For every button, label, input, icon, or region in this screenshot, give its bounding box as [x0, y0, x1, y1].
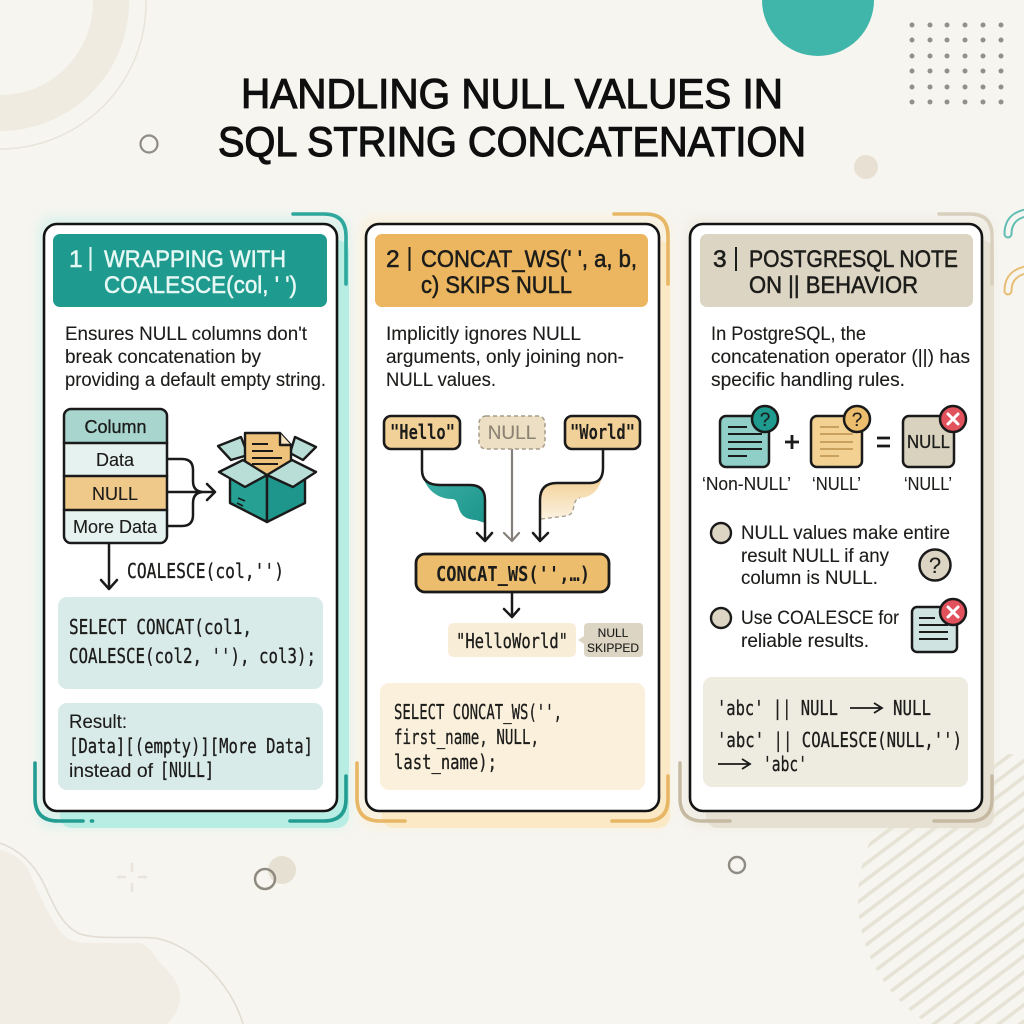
card 3 body [690, 224, 982, 811]
icon: null document: ? [852, 410, 862, 431]
bullet 1: result NULL if any [741, 546, 889, 567]
background: bottom-left blob [0, 850, 180, 1024]
concat_ws function box [416, 554, 609, 592]
card 3 description: specific handling rules. [711, 370, 905, 391]
hello token: "Hello" [390, 420, 455, 444]
equation labels: ‘NULL’ [812, 474, 861, 494]
card 2 corner accents [357, 214, 668, 821]
card 2 header: CONCAT_WS(' ', a, b, [421, 246, 637, 273]
column table: Data [96, 450, 135, 470]
result arrow [504, 593, 519, 617]
icon: null result: NULL [907, 432, 950, 452]
background: top-left ring [0, 0, 146, 149]
background: plus mark [118, 864, 146, 891]
card 2 description: Implicitly ignores NULL [386, 324, 581, 345]
column table [64, 409, 167, 543]
card 3 glow [684, 216, 994, 828]
card 3 description: In PostgreSQL, the [711, 324, 866, 345]
helloworld output [448, 623, 576, 657]
bullet 2: reliable results. [741, 631, 869, 652]
card 1 code block: SELECT CONCAT(col1, [69, 615, 252, 639]
orange ribbon [540, 470, 603, 520]
background: overlapping circle and ring [255, 856, 296, 889]
card 3 corner accents [680, 214, 992, 821]
title [218, 70, 806, 165]
equation labels: ‘NULL’ [904, 474, 952, 494]
icon: null result [903, 406, 966, 467]
card 3 header: POSTGRESQL NOTE [749, 246, 958, 273]
null token [479, 416, 545, 449]
card 3 code block: NULL [893, 696, 931, 720]
icon: non-null document [720, 406, 778, 467]
hello token [384, 416, 460, 449]
icon: question mark: ? [929, 553, 941, 578]
card 1 code block [58, 597, 323, 689]
card 1 result block: Result: [69, 712, 127, 733]
panel: 2 concat_ws skips null [357, 214, 670, 828]
panel: 3 postgresql note [680, 214, 994, 828]
background: dot grid [910, 22, 1004, 104]
null skipped tag [578, 623, 643, 657]
arrows merging into box [168, 459, 215, 526]
card 3 header: 3 [713, 246, 727, 273]
card 2 glow [360, 216, 670, 828]
card 1 result block [58, 703, 323, 790]
title: HANDLING NULL VALUES IN [241, 70, 783, 117]
bullet 1: column is NULL. [741, 568, 878, 589]
card 1 glow [38, 216, 349, 828]
card 1 description: break concatenation by [65, 347, 261, 368]
bullet 1: NULL values make entire [741, 523, 950, 544]
equation labels: ‘Non-NULL’ [702, 474, 791, 494]
card 3 code block: 'abc' || COALESCE(NULL,'') [717, 728, 962, 752]
orange ribbon dashed edge [541, 498, 580, 519]
icon: null document [811, 406, 870, 467]
coalesce down arrow [101, 544, 117, 589]
card 2 header: 2 [386, 246, 400, 273]
card 3 description: concatenation operator (||) has [711, 347, 970, 368]
null connector [504, 449, 519, 541]
column table: More Data [73, 517, 158, 537]
card 2 code block: last_name); [394, 750, 497, 774]
world connector [533, 449, 603, 541]
plus sign [785, 435, 799, 449]
column table: Column [84, 417, 147, 437]
bullet 2: Use COALESCE for [741, 608, 900, 629]
card 3 header: ON || BEHAVIOR [749, 272, 918, 299]
background: small ring left of title [140, 136, 158, 152]
background: bottom-left curve [0, 843, 243, 1024]
hello connector [422, 449, 492, 541]
card 2 description: NULL values. [386, 370, 496, 391]
card 1 description [65, 324, 326, 391]
title: SQL STRING CONCATENATION [218, 118, 806, 165]
background: teal circle [762, 0, 874, 56]
world token: "World" [570, 420, 635, 444]
coalesce label: COALESCE(col,'') [127, 559, 284, 583]
panel: 1 wrapping with coalesce [35, 214, 349, 828]
null skipped tag: NULL [598, 626, 629, 640]
background: right-edge teal arc [1008, 212, 1024, 234]
icon: open box with document [218, 433, 316, 522]
card 2 code block: first_name, NULL, [394, 725, 539, 749]
helloworld output: "HelloWorld" [456, 629, 568, 653]
background: striped circle [850, 745, 1024, 1024]
card 2 code block: SELECT CONCAT_WS('', [394, 700, 562, 724]
card 3 description [711, 324, 970, 391]
card 1 result block: instead of [69, 761, 154, 782]
bullet 1 [711, 523, 950, 589]
background: beige dot [854, 155, 878, 179]
card 3 code block: 'abc' || NULL [717, 696, 838, 720]
bullet 2 [711, 608, 900, 652]
card 2 description [386, 324, 624, 391]
icon: document with error [912, 599, 966, 652]
card 1 description: Ensures NULL columns don't [65, 324, 308, 345]
icon: non-null document: ? [760, 410, 770, 431]
card 2 description: arguments, only joining non- [386, 347, 624, 368]
card 1 result block: [NULL] [160, 758, 214, 782]
background: right-edge orange arc [1008, 269, 1024, 291]
card 1 corner accents [35, 214, 346, 821]
null token: NULL [488, 423, 536, 444]
world token [565, 416, 640, 449]
card 1 result block: [Data][(empty)][More Data] [69, 734, 313, 758]
column table: NULL [92, 484, 138, 504]
card 2 body [366, 224, 659, 811]
background: small ring below card 3 [729, 857, 745, 873]
card 1 body [44, 224, 337, 811]
null skipped tag: SKIPPED [587, 641, 639, 655]
card 1 header: WRAPPING WITH [104, 246, 286, 273]
teal ribbon [422, 470, 485, 523]
concat_ws function box: CONCAT_WS('',…) [436, 562, 590, 586]
equation labels [702, 474, 952, 494]
card 2 header [375, 234, 648, 307]
card 1 header [53, 234, 327, 307]
card 3 code block [703, 677, 968, 787]
card 1 header: COALESCE(col, ' ') [104, 272, 297, 299]
card 1 code block: COALESCE(col2, ''), col3); [69, 644, 316, 668]
card 3 header [700, 234, 973, 307]
equals sign [877, 438, 890, 446]
card 2 code block [380, 683, 645, 790]
icon: question mark [920, 550, 950, 580]
card 3 code block: 'abc' [763, 752, 807, 776]
card 1 description: providing a default empty string. [65, 370, 326, 391]
card 1 header: 1 [69, 246, 83, 273]
card 2 header: c) SKIPS NULL [421, 272, 572, 299]
